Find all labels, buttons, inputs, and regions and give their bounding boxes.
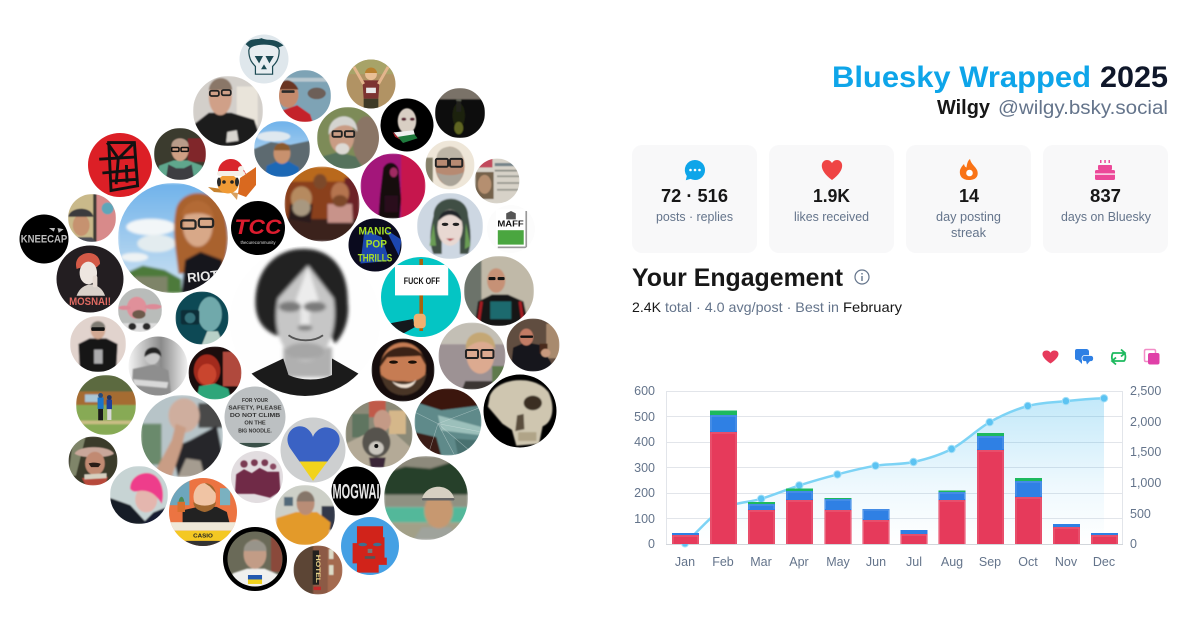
engagement summary bbox=[632, 299, 902, 315]
avatar: dark band photo bbox=[231, 451, 283, 503]
stat label: days on Bluesky bbox=[1061, 209, 1151, 224]
avatar: cartoon man at Casio keyboard bbox=[169, 478, 237, 546]
avatar: manic pop thrills poster bbox=[348, 218, 402, 272]
stat value: 837 bbox=[1090, 186, 1121, 206]
right axis labels bbox=[1130, 384, 1161, 551]
stat label bbox=[936, 209, 1001, 240]
month labels: Dec bbox=[1093, 555, 1115, 569]
avatar: big noodle sign: DO NOT CLIMB bbox=[230, 413, 280, 419]
left axis labels: 300 bbox=[634, 461, 655, 475]
avatar: Mosnai poster bbox=[56, 246, 124, 312]
avatar: man with schnauzer dog bbox=[346, 400, 412, 468]
avatar: woman with red hair and glasses bbox=[118, 183, 228, 293]
avatar: woman with pink hair bbox=[110, 466, 168, 524]
engagement summary: 2.4K bbox=[632, 299, 662, 315]
avatar: man with a pint bbox=[506, 318, 560, 372]
engagement summary: total · 4.0 avg/post · Best in bbox=[665, 299, 839, 315]
avatar: red hat selfie with lake bbox=[278, 70, 331, 122]
avatar: man in cap bbox=[68, 194, 116, 242]
stat label: likes received bbox=[794, 209, 869, 224]
avatar: KNEECAP logo bbox=[20, 214, 68, 264]
avatar: cricket players on pitch bbox=[76, 375, 136, 435]
avatar: big black and white portrait bbox=[252, 246, 358, 396]
engagement summary: February bbox=[843, 299, 902, 315]
stat value: 14 bbox=[959, 186, 979, 206]
panel: posts and replies bbox=[632, 145, 757, 253]
stat label: posts · replies bbox=[656, 209, 733, 224]
avatar: MAFF logo: MAFF bbox=[497, 219, 524, 229]
avatar: TCC logo: thecurecommunity bbox=[240, 240, 276, 246]
avatar: blond man with glasses bbox=[438, 322, 506, 390]
left axis labels: 200 bbox=[634, 486, 655, 500]
month labels: Jul bbox=[906, 555, 922, 569]
avatar: bearded man with glasses smiling bbox=[426, 140, 474, 190]
avatar: big noodle sign: FOR YOUR bbox=[242, 398, 269, 404]
avatar: KNEECAP logo: KNEECAP bbox=[21, 233, 67, 245]
avatar: man leaning on hand bbox=[141, 395, 223, 477]
avatar: red faced woman selfie bbox=[188, 346, 242, 400]
right axis labels: 2,500 bbox=[1130, 384, 1161, 398]
avatar: shattered glass bbox=[414, 388, 482, 456]
avatar: cartoon man in running bib bbox=[346, 60, 396, 108]
avatar: woman in purple pink light bbox=[360, 154, 426, 218]
avatar: woman with red hair and glasses: RIOT bbox=[186, 267, 219, 286]
avatar: man with glasses in black t-shirt bbox=[193, 76, 263, 146]
avatar: TCC logo bbox=[231, 201, 285, 255]
icon: likes heart bbox=[1042, 350, 1059, 364]
avatar: hotel building: HOTEL bbox=[314, 555, 321, 583]
month labels: May bbox=[826, 555, 851, 569]
avatar: big noodle sign: SAFETY, PLEASE bbox=[228, 405, 282, 411]
avatar: man in blue jacket with mountains bbox=[254, 121, 310, 177]
avatar: MAFF logo bbox=[498, 211, 528, 248]
avatar: dark night landscape bbox=[435, 88, 485, 138]
panel: posting streak bbox=[906, 145, 1031, 253]
icon: birthday cake bbox=[1095, 160, 1115, 180]
cumulative line bbox=[685, 398, 1104, 544]
avatar: man in grey waistcoat bbox=[154, 128, 206, 180]
avatar: two bearded men in a bar bbox=[284, 166, 360, 242]
stat value: 1.9K bbox=[813, 186, 850, 206]
avatar: manic pop thrills poster: POP bbox=[366, 239, 387, 251]
avatar: MOGWAI logo bbox=[332, 466, 380, 516]
panel: days on Bluesky bbox=[1043, 145, 1168, 253]
icon: heart bbox=[822, 160, 842, 180]
right axis labels: 0 bbox=[1130, 537, 1137, 551]
avatar: grey-haired man with glasses bbox=[317, 107, 381, 169]
avatar: big noodle sign: BIG NOODLE. bbox=[238, 428, 272, 434]
right axis labels: 500 bbox=[1130, 507, 1151, 521]
avatar: skull drawing bbox=[240, 34, 288, 84]
avatar: big noodle sign bbox=[224, 386, 286, 448]
avatar: fossil skull on black bbox=[484, 374, 556, 448]
avatar: teal protest sign: FUCK OFF bbox=[404, 276, 440, 286]
month labels: Apr bbox=[789, 555, 809, 569]
avatar: woman with green dreadlocks bbox=[417, 193, 483, 259]
avatar: man reading book bbox=[464, 256, 534, 326]
icon: replies bubbles bbox=[1075, 349, 1094, 364]
right axis labels: 1,500 bbox=[1130, 445, 1161, 459]
heading: your engagement: Your Engagement bbox=[632, 264, 844, 292]
stat label: streak bbox=[951, 225, 986, 240]
month labels: Jun bbox=[866, 555, 886, 569]
avatar: black and white man arms crossed bbox=[128, 336, 188, 396]
stat value: 72 · 516 bbox=[661, 186, 728, 206]
avatar: hotel building bbox=[294, 546, 342, 594]
panel: avatar bubble cluster bbox=[20, 34, 560, 594]
avatar: Ukraine coloured heart drawing bbox=[280, 418, 346, 482]
handle line: Wilgy bbox=[937, 97, 991, 119]
month labels bbox=[675, 555, 1115, 569]
month labels: Feb bbox=[712, 555, 734, 569]
icon: repost arrows bbox=[1112, 350, 1125, 364]
bar inner highlights bbox=[673, 416, 1117, 544]
month labels: Nov bbox=[1055, 555, 1078, 569]
icon: flame bbox=[960, 159, 978, 180]
month labels: Jan bbox=[675, 555, 695, 569]
month labels: Mar bbox=[750, 555, 772, 569]
handle line: @wilgy.bsky.social bbox=[998, 98, 1168, 119]
avatar: man in cap at mountain lake bbox=[384, 456, 468, 540]
avatar: pale face on black with flag scarf bbox=[380, 98, 434, 152]
chart legend icons bbox=[1042, 349, 1160, 364]
cumulative area bbox=[685, 398, 1104, 544]
avatar: cartoon man at Casio keyboard: CASIO bbox=[193, 534, 213, 540]
month labels: Aug bbox=[941, 555, 963, 569]
avatar: manic pop thrills poster: MANIC bbox=[358, 225, 392, 237]
bars: replies bbox=[672, 415, 1118, 535]
left axis labels: 400 bbox=[634, 435, 655, 449]
bars: likes bbox=[672, 432, 1118, 544]
avatar: man in yellow t-shirt bbox=[275, 485, 335, 545]
handle line bbox=[937, 97, 1168, 119]
avatar: newspaper cutting bbox=[474, 158, 520, 204]
left axis labels bbox=[634, 384, 655, 551]
left axis labels: 600 bbox=[634, 384, 655, 398]
avatar: red mask on blue bbox=[341, 517, 399, 575]
left axis labels: 100 bbox=[634, 512, 655, 526]
avatar: teal duotone man with camera bbox=[176, 292, 228, 344]
avatar: bearded man close up bbox=[372, 338, 434, 402]
icon: quote squares bbox=[1144, 350, 1160, 364]
avatar: man in England shirt with black ring bbox=[223, 527, 287, 591]
left axis labels: 0 bbox=[648, 537, 655, 551]
avatar: big noodle sign: ON THE bbox=[244, 421, 266, 427]
right axis labels: 1,000 bbox=[1130, 476, 1161, 490]
stat label: day posting bbox=[936, 209, 1001, 224]
avatar: black red square logo bbox=[88, 133, 152, 197]
bars: reposts bbox=[710, 410, 1042, 504]
chart: monthly engagement bbox=[634, 384, 1161, 569]
panel: likes received bbox=[769, 145, 894, 253]
avatar: TCC logo: TCC bbox=[234, 214, 282, 239]
right axis labels: 2,000 bbox=[1130, 415, 1161, 429]
title: Bluesky Wrapped bbox=[832, 61, 1091, 94]
avatar: man in hat with moustache bbox=[68, 436, 118, 486]
avatar: Mosnai poster: MOSNAI! bbox=[69, 296, 111, 308]
month labels: Sep bbox=[979, 555, 1001, 569]
icon: speech bubble bbox=[685, 160, 705, 180]
avatar: pink creature bbox=[118, 288, 162, 332]
avatar: MOGWAI logo: MOGWAI bbox=[332, 480, 380, 503]
avatar: santa goldfish sticker bbox=[208, 159, 256, 200]
line markers bbox=[682, 395, 1108, 547]
title: 2025 bbox=[1100, 61, 1168, 94]
month labels: Oct bbox=[1018, 555, 1038, 569]
avatar: man with black t-shirt bbox=[70, 316, 126, 372]
avatar: manic pop thrills poster: THRILLS bbox=[358, 252, 392, 264]
left axis labels: 500 bbox=[634, 410, 655, 424]
avatar: teal protest sign bbox=[381, 257, 461, 337]
icon: info bbox=[855, 270, 869, 284]
